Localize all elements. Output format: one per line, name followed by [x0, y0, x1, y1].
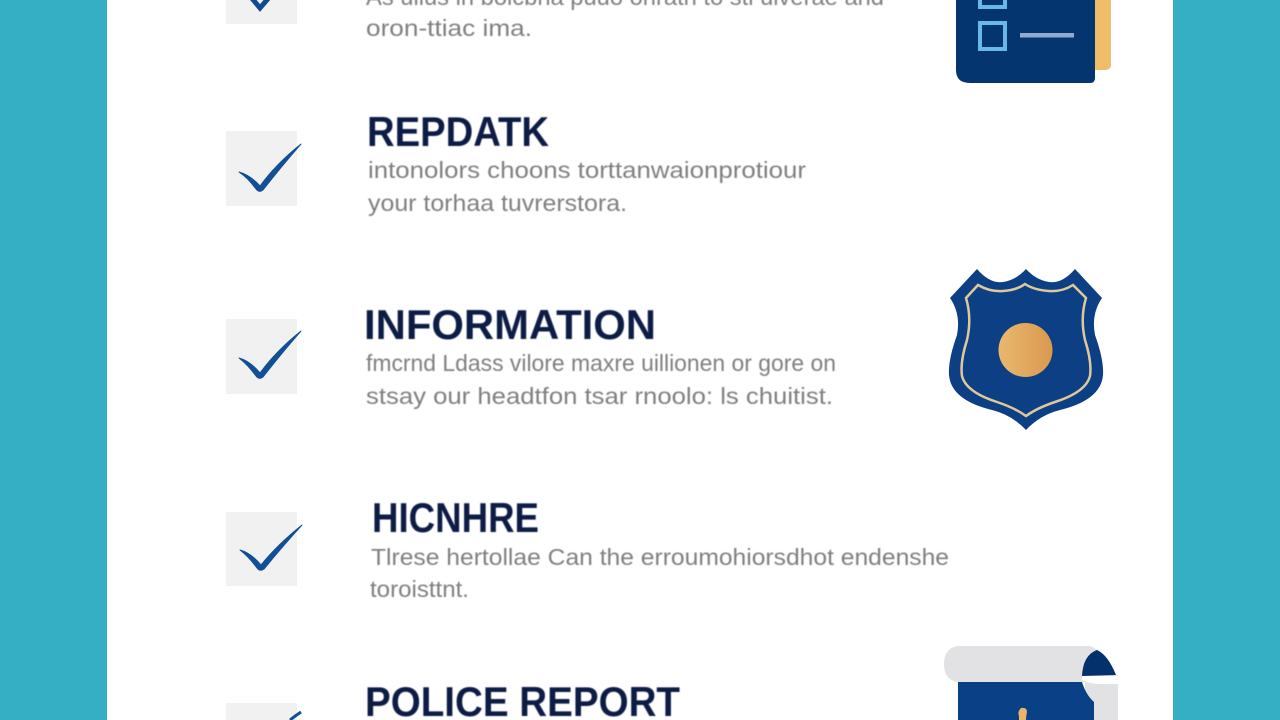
- body text 1: [366, 0, 884, 41]
- body text 3: fmcrnd Ldass vilore maxre uillionen or gore on: [366, 350, 836, 376]
- body text 2: intonolors choons torttanwaionprotiour: [368, 157, 806, 183]
- icon: police report scroll: [944, 646, 1122, 720]
- checklist item 5 (cropped): [226, 678, 680, 720]
- checklist item 4: [226, 494, 949, 602]
- body text 3: [366, 350, 836, 409]
- checklist item 3: [226, 301, 836, 409]
- checkbox 5: [226, 703, 301, 720]
- heading: INFORMATION: INFORMATION: [364, 301, 656, 348]
- body text 4: toroisttnt.: [370, 576, 469, 602]
- body text 2: [368, 157, 806, 216]
- checklist item 1 (cropped): [226, 0, 884, 41]
- checklist item 2: [226, 108, 806, 216]
- body text 4: [370, 544, 949, 602]
- heading: REPDATK: REPDATK: [367, 108, 549, 155]
- body text 1: oron-ttiac ima.: [366, 15, 532, 41]
- heading: HICNHRE: HICNHRE: [372, 494, 539, 541]
- checkbox 3: [226, 319, 301, 394]
- body text 2: your torhaa tuvrerstora.: [368, 190, 627, 216]
- icon: checklist clipboard: [956, 0, 1111, 83]
- checkbox 1: [226, 0, 297, 24]
- checkbox 4: [226, 512, 302, 586]
- body text 3: stsay our headtfon tsar rnoolo: ls chuitist.: [366, 383, 833, 409]
- icon: police shield badge: [949, 269, 1103, 430]
- checkbox 2: [226, 131, 301, 206]
- body text 4: Tlrese hertollae Can the erroumohiorsdhot endenshe: [371, 544, 949, 570]
